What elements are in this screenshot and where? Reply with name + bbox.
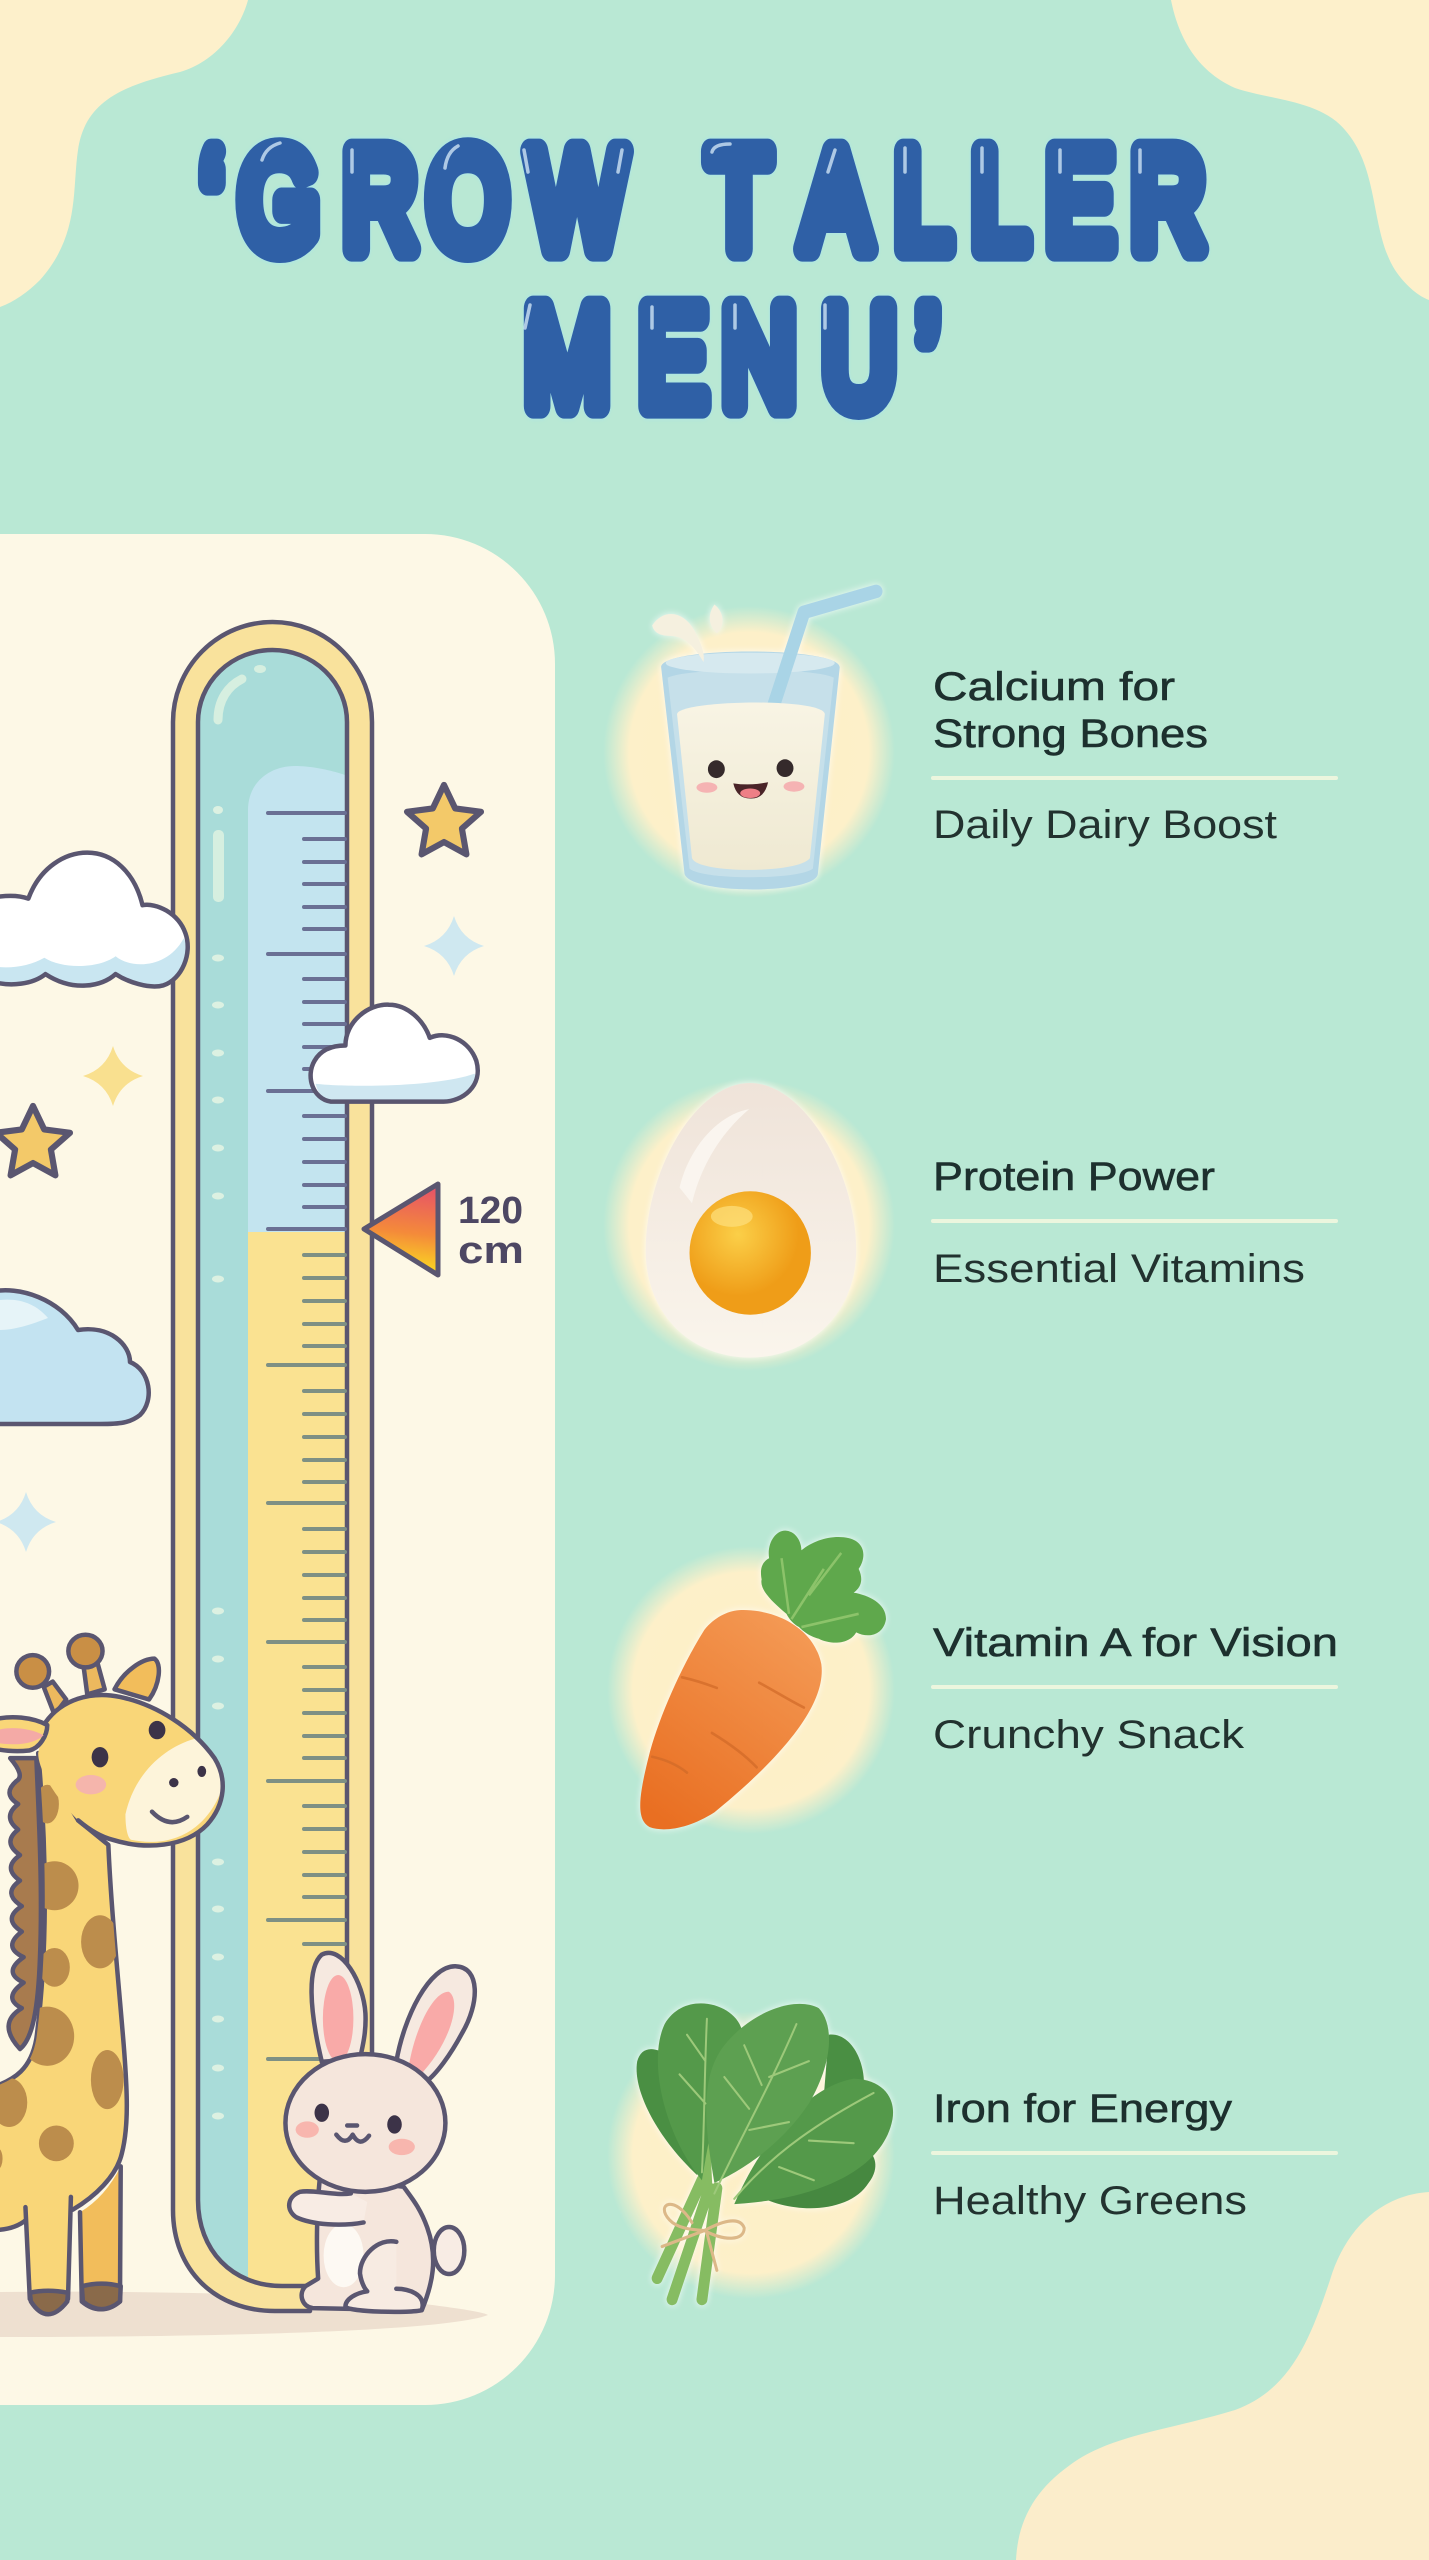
food list: [603, 591, 1338, 2299]
giraffe cheek: [76, 1775, 106, 1794]
item: protein: [603, 1079, 1336, 1371]
bunny body: [302, 2177, 433, 2310]
bunny eyes: [315, 2104, 329, 2122]
item: vitamin A: [607, 1531, 1338, 1834]
divider: [933, 1219, 1336, 1223]
tube interior: [200, 652, 345, 2284]
cloud: top left: [0, 853, 188, 986]
bead pill: [213, 830, 224, 902]
bunny cheeks: [296, 2121, 319, 2138]
giraffe nostrils: [169, 1778, 179, 1787]
item: calcium: [603, 591, 1336, 898]
giraffe left ear: [0, 1717, 47, 1751]
marker label: 120 cm: cm: [458, 1230, 524, 1272]
subtitle: Crunchy Snack: [933, 1713, 1245, 1757]
giraffe mane: [9, 1758, 41, 2049]
divider: [933, 2151, 1336, 2155]
giraffe head outline: [45, 1695, 223, 1845]
heading: Vitamin A for Vision: [933, 1621, 1338, 1665]
tube outlines: [173, 622, 372, 2311]
corner blob: top left: [0, 0, 248, 307]
sparkle: yellow: [83, 1046, 143, 1106]
giraffe horns: [44, 1682, 66, 1715]
title line 1: ‘GROW TALLER: [201, 122, 1205, 280]
glow: egg: [603, 1079, 895, 1371]
beads: [212, 806, 224, 2120]
marker arrow: [364, 1184, 438, 1275]
cloud: at tube: [311, 1005, 478, 1102]
giraffe front hoof: [30, 2291, 68, 2314]
icon: egg: [646, 1083, 856, 1358]
cloud: blue lower left: [0, 1290, 149, 1424]
bunny tail: [434, 2227, 464, 2274]
giraffe rear hoof: [82, 2284, 121, 2309]
tube casing: [173, 622, 372, 2311]
giraffe spots: [0, 1785, 124, 2169]
giraffe right ear: [115, 1659, 159, 1699]
giraffe muzzle: [125, 1739, 221, 1842]
icon: carrot: [640, 1531, 886, 1829]
glow: carrot: [607, 1546, 895, 1834]
star: left: [0, 1106, 70, 1175]
title: [201, 122, 1205, 437]
bunny left ear: [312, 1953, 366, 2062]
divider: [933, 1685, 1336, 1689]
ground shadow: [0, 2292, 488, 2337]
giraffe eyes: [92, 1747, 108, 1767]
bunny head: [285, 2054, 445, 2192]
subtitle: Essential Vitamins: [933, 1247, 1305, 1291]
ruler ticks: blue section: [268, 813, 345, 1229]
title glossy highlights: [262, 143, 1140, 328]
item: iron: [607, 2003, 1336, 2299]
heading: Iron for Energy: [933, 2087, 1232, 2131]
subtitle: Daily Dairy Boost: [933, 803, 1277, 847]
heading: Protein Power: [933, 1155, 1215, 1199]
bunny nose and mouth: [336, 2126, 369, 2142]
bunny right ear: [396, 1966, 475, 2082]
star: top right: [407, 785, 481, 854]
tube highlight dot: [254, 665, 266, 673]
ruler ticks: yellow section: [268, 1255, 345, 2059]
giraffe body and neck: [0, 1753, 127, 2230]
bunny: [285, 1953, 475, 2312]
giraffe smile: [152, 1812, 187, 1822]
panel: growth chart: [0, 534, 555, 2405]
bunny hind leg: [345, 2241, 423, 2312]
glow: spinach: [607, 2011, 895, 2299]
giraffe: [0, 1635, 223, 2314]
subtitle: Healthy Greens: [933, 2179, 1247, 2223]
heading: Strong Bones: [933, 712, 1208, 756]
sparkle: blue right: [424, 916, 484, 976]
giraffe back leg: [80, 2166, 121, 2309]
icon: spinach: [637, 2003, 893, 2299]
corner blob: bottom right: [1016, 2192, 1429, 2560]
divider: [933, 776, 1336, 780]
sparkle: blue left: [0, 1492, 56, 1552]
tube highlight: [218, 679, 242, 720]
icon: milk glass: [652, 591, 876, 889]
bunny belly: [324, 2224, 364, 2287]
giraffe front leg: [25, 2197, 71, 2313]
heading: Calcium for: [933, 665, 1175, 709]
title line 2: MENU’: [525, 279, 939, 437]
marker label: 120 cm: 120: [458, 1190, 523, 1232]
bunny arm: [289, 2191, 367, 2225]
giraffe head: [38, 1695, 223, 1845]
panel background: [0, 534, 555, 2405]
height tube: [173, 622, 372, 2311]
corner blob: top right: [1171, 0, 1429, 300]
glow: glass: [603, 606, 895, 898]
